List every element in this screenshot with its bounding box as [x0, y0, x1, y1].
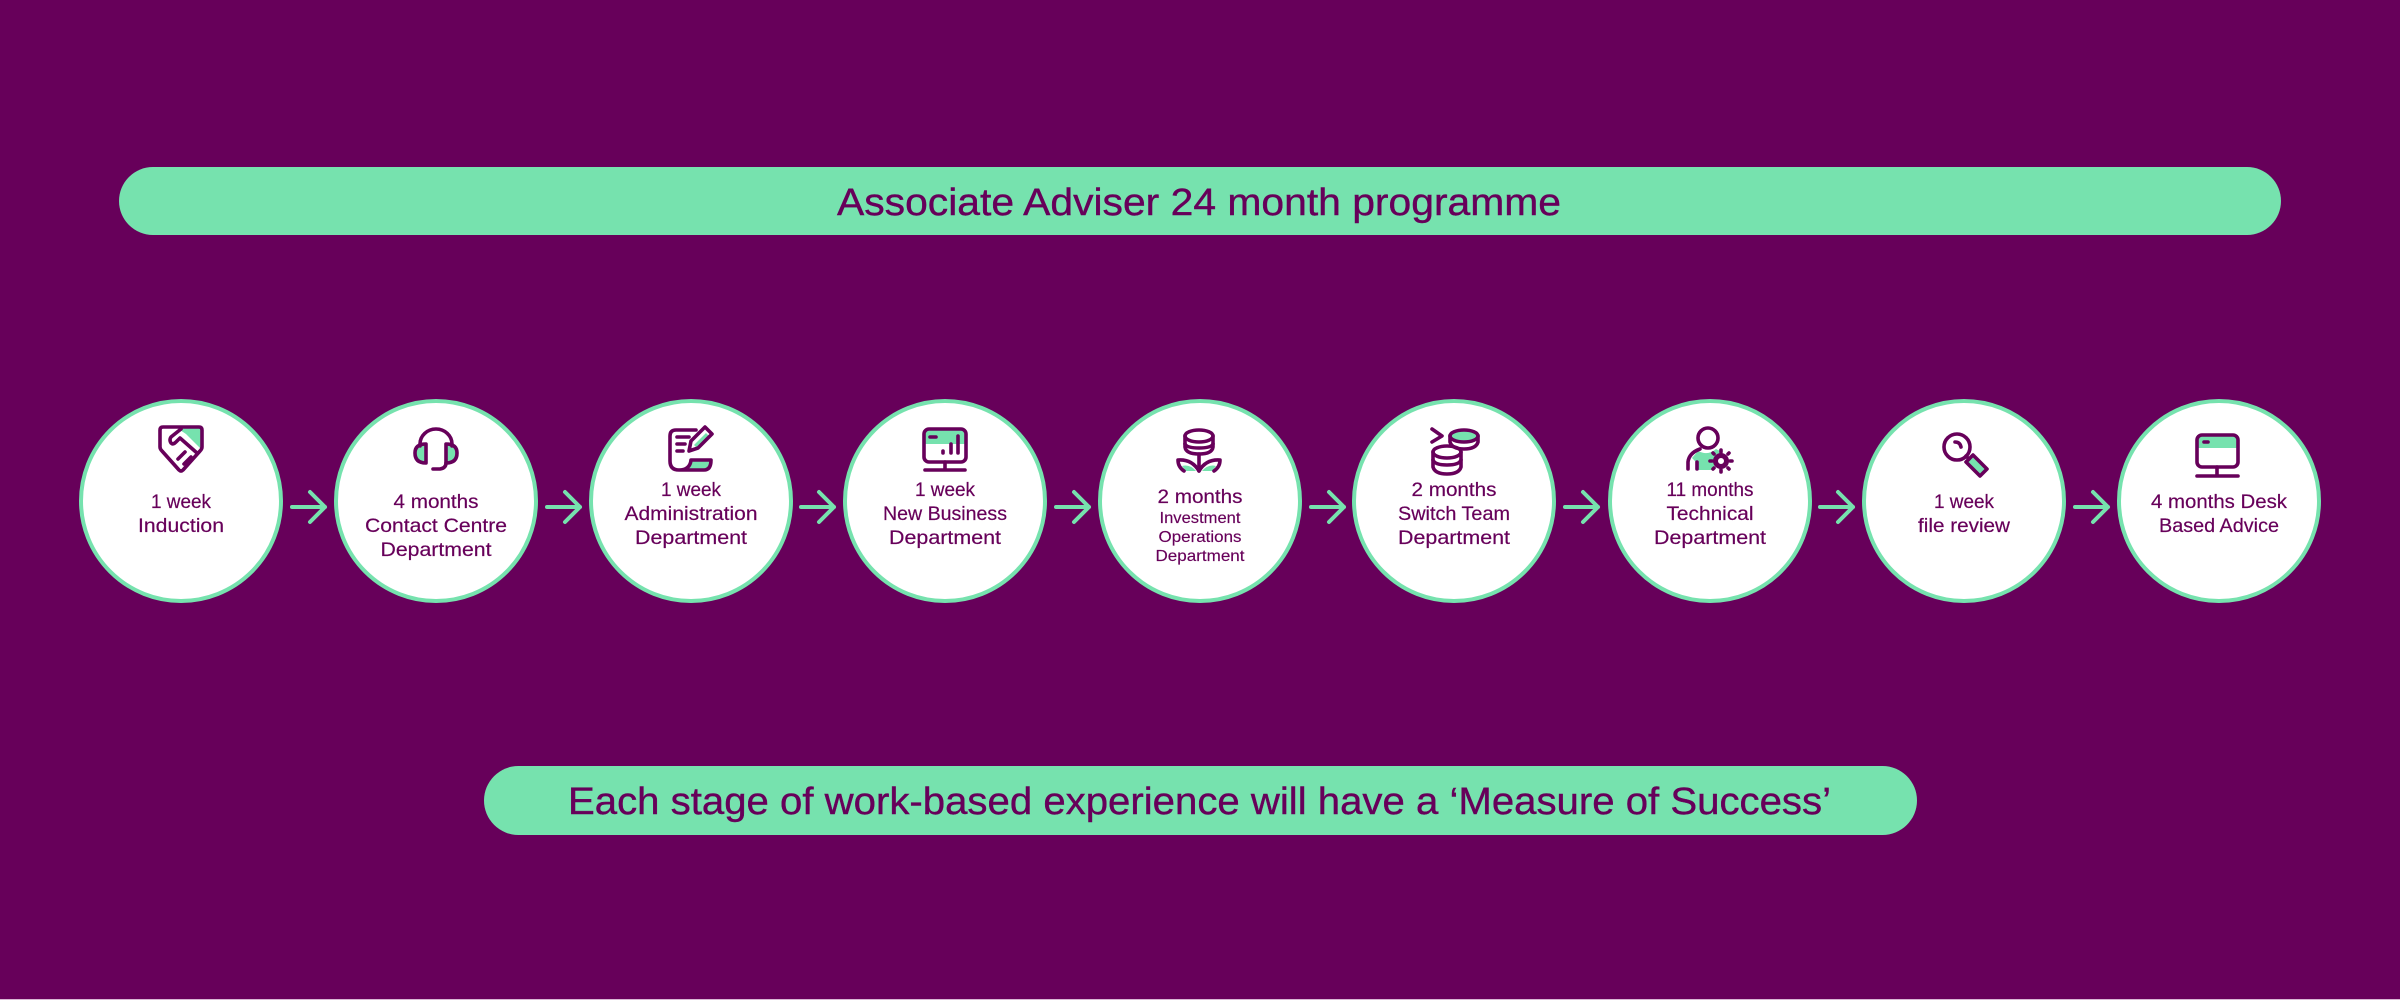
- footer banner: [484, 766, 1917, 835]
- icon: monitor with bar chart: [924, 429, 966, 470]
- step 5: investment operations: Operations: [1158, 529, 1242, 546]
- step 7: technical: 11 months: [1666, 479, 1754, 501]
- step 3: administration: 1 week: [661, 479, 721, 501]
- step 5: investment operations: Department: [1156, 548, 1245, 565]
- step 6: switch team: Department: [1398, 527, 1511, 549]
- step 1: induction: Induction: [138, 515, 224, 537]
- step 5: investment operations: 2 months: [1158, 486, 1243, 508]
- header banner: [119, 167, 2281, 235]
- step 8: file review: [1864, 401, 2064, 601]
- step 6: switch team: 2 months: [1412, 479, 1497, 501]
- arrow 8: [2075, 492, 2108, 522]
- step 5: investment operations: Investment: [1160, 510, 1241, 527]
- arrow 7: [1820, 492, 1853, 522]
- step 2: contact centre: 4 months: [394, 491, 479, 513]
- icon: person with gear: [1688, 428, 1732, 472]
- step 2: contact centre: Contact Centre: [365, 515, 507, 537]
- step 7: technical: [1610, 401, 1810, 601]
- step 4: new business: 1 week: [915, 479, 975, 501]
- header banner: Associate Adviser 24 month programme: [837, 182, 1561, 224]
- arrow 4: [1056, 492, 1089, 522]
- step 8: file review: file review: [1918, 515, 2011, 537]
- step 4: new business: Department: [889, 527, 1002, 549]
- step 9: desk based advice: Based Advice: [2159, 515, 2279, 537]
- icon: handshake shield: [160, 427, 202, 471]
- step 4: new business: New Business: [883, 503, 1007, 525]
- step 7: technical: Department: [1654, 527, 1767, 549]
- arrow 2: [547, 492, 580, 522]
- step 3: administration: [591, 401, 791, 601]
- step 2: contact centre: [336, 401, 536, 601]
- step 6: switch team: Switch Team: [1398, 503, 1510, 525]
- step 1: induction: 1 week: [151, 491, 211, 513]
- arrow 5: [1311, 492, 1344, 522]
- arrow 6: [1565, 492, 1598, 522]
- step 3: administration: Administration: [624, 503, 758, 525]
- arrow 3: [801, 492, 834, 522]
- icon: document and pen: [670, 427, 712, 470]
- step 9: desk based advice: 4 months Desk: [2151, 491, 2287, 513]
- step 6: switch team: [1354, 401, 1554, 601]
- icon: desktop monitor: [2197, 435, 2238, 476]
- footer banner: Each stage of work-based experience will have a ‘Measure of Success’: [568, 781, 1831, 823]
- step 1: induction: [81, 401, 281, 601]
- step 7: technical: Technical: [1666, 503, 1754, 525]
- arrow 1: [292, 492, 325, 522]
- icon: coin stack plant: [1178, 430, 1220, 471]
- step 2: contact centre: Department: [380, 539, 492, 561]
- step 4: new business: [845, 401, 1045, 601]
- step 5: investment operations: [1100, 401, 1300, 601]
- icon: switching coins: [1432, 429, 1478, 474]
- icon: magnifying glass: [1944, 434, 1987, 476]
- icon: headset: [415, 429, 457, 469]
- step 9: desk based advice: [2119, 401, 2319, 601]
- step 8: file review: 1 week: [1934, 491, 1994, 513]
- step 3: administration: Department: [635, 527, 748, 549]
